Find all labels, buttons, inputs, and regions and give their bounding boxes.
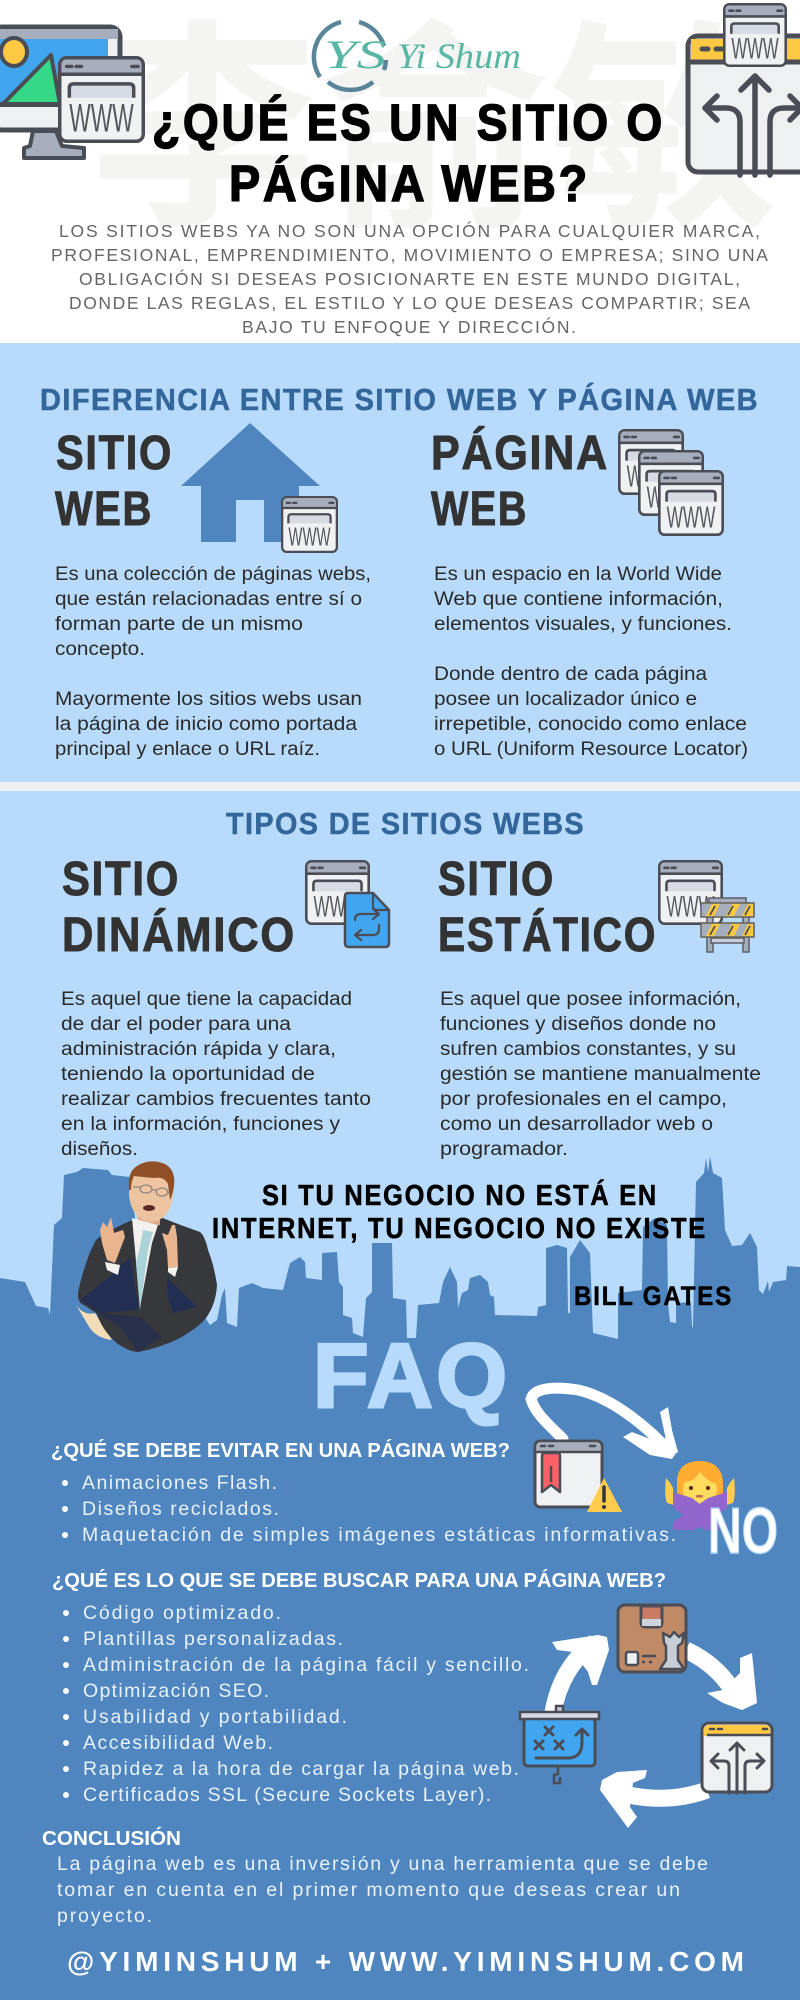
list: buscar: Accesibilidad Web.	[83, 1732, 273, 1754]
sitio dinamico label: SITIO	[62, 853, 180, 906]
pagina web text	[434, 564, 748, 760]
arrow: to no-sign person	[531, 1388, 678, 1459]
pagina web label	[431, 426, 609, 536]
sitio dinamico text: administración rápida y clara,	[61, 1039, 336, 1060]
icon: browser by house: WWW	[288, 522, 331, 552]
conclusion text: tomar en cuenta en el primer momento que deseas crear un	[57, 1879, 680, 1901]
icon: browser with sync document	[306, 861, 389, 947]
icon: browser stack: WWW	[667, 501, 716, 534]
logo: Yi Shum	[314, 22, 521, 90]
footer handle: @YIMINSHUM + WWW.YIMINSHUM.COM	[67, 1946, 744, 1977]
title: ¿QUÉ ES UN SITIO O	[152, 94, 665, 151]
icon: browser with barricade: WWW	[666, 891, 715, 924]
list: evitar: Maquetación de simples imágenes estáticas informativas.	[82, 1524, 676, 1546]
sitio estatico text	[440, 989, 761, 1160]
sitio dinamico label: DINÁMICO	[62, 908, 296, 962]
heading: tipos: TIPOS DE SITIOS WEBS	[226, 806, 585, 841]
heading: diferencia: DIFERENCIA ENTRE SITIO WEB Y PÁGINA WEB	[40, 382, 759, 417]
sitio dinamico text: teniendo la oportunidad de	[61, 1064, 315, 1085]
list: buscar: Certificados SSL (Secure Sockets Layer).	[83, 1784, 491, 1806]
icon: browser bookmark warning	[535, 1441, 622, 1512]
icon: browser header left: WWW	[69, 97, 134, 141]
intro text: LOS SITIOS WEBS YA NO SON UNA OPCIÓN PARA CUALQUIER MARCA,	[59, 220, 760, 241]
quote	[212, 1178, 707, 1245]
icon: browser header right	[724, 4, 786, 66]
sitio dinamico text: en la información, funciones y	[61, 1114, 341, 1135]
sitio dinamico label	[62, 853, 296, 962]
heading: evitar: ¿QUÉ SE DEBE EVITAR EN UNA PÁGINA WEB?	[51, 1439, 510, 1462]
list: buscar: Código optimizado.	[83, 1602, 281, 1624]
title	[152, 94, 665, 212]
list: buscar	[63, 1602, 529, 1806]
pagina web label: PÁGINA	[431, 426, 609, 480]
list: buscar: Rapidez a la hora de cargar la página web.	[83, 1758, 519, 1780]
heading: conclusion: CONCLUSIÓN	[42, 1826, 181, 1850]
intro text	[51, 220, 768, 337]
sitio web label	[55, 427, 173, 536]
icon: monitor with picture	[0, 27, 120, 158]
icon: strategy board	[520, 1706, 599, 1783]
sitio web text: Es una colección de páginas webs,	[55, 564, 371, 585]
conclusion text: proyecto.	[57, 1905, 152, 1927]
sitio dinamico text: diseños.	[61, 1139, 138, 1160]
icon: browser stack: WWW	[627, 460, 676, 493]
intro text: OBLIGACIÓN SI DESEAS POSICIONARTE EN ESTE MUNDO DIGITAL,	[79, 268, 740, 289]
logo: Yi Shum: YS	[324, 32, 386, 77]
quote author: BILL GATES	[574, 1281, 733, 1311]
icon: box with chess rook	[618, 1605, 686, 1672]
pagina web text: elementos visuales, y funciones.	[434, 614, 732, 635]
cycle arrows	[552, 1635, 757, 1828]
section: buscar	[52, 1569, 666, 1806]
icon: browser with sync document: WWW	[313, 891, 362, 924]
sitio estatico text: gestión se mantiene manualmente	[440, 1064, 761, 1085]
panel: tipos de sitios	[0, 791, 800, 2000]
list: buscar: Administración de la página fácil y sencillo.	[83, 1654, 529, 1676]
pagina web text: o URL (Uniform Resource Locator)	[434, 739, 748, 760]
logo: Yi Shum: Yi Shum	[397, 36, 521, 76]
quote: INTERNET, TU NEGOCIO NO EXISTE	[212, 1213, 707, 1245]
sitio web text: concepto.	[55, 639, 145, 660]
icon: person gesturing no	[665, 1461, 735, 1530]
intro text: BAJO TU ENFOQUE Y DIRECCIÓN.	[242, 316, 576, 337]
list: buscar: Optimización SEO.	[83, 1680, 269, 1702]
intro text: DONDE LAS REGLAS, EL ESTILO Y LO QUE DESEAS COMPARTIR; SEA	[69, 293, 750, 313]
pagina web text: Donde dentro de cada página	[434, 664, 707, 685]
icon: browser with barricade	[659, 861, 754, 952]
sitio web text: forman parte de un mismo	[55, 614, 303, 635]
sitio web label: SITIO	[56, 427, 173, 480]
sitio web text: principal y enlace o URL raíz.	[55, 739, 320, 760]
intro text: PROFESIONAL, EMPRENDIMIENTO, MOVIMIENTO O EMPRESA; SINO UNA	[51, 245, 768, 265]
portrait: Bill Gates	[76, 1161, 217, 1352]
sitio web text: Mayormente los sitios webs usan	[55, 689, 362, 710]
panel: diferencia	[0, 343, 800, 782]
list: evitar	[62, 1472, 676, 1546]
icon: browser by house	[282, 497, 337, 552]
list: evitar: Animaciones Flash.	[82, 1472, 277, 1494]
sitio estatico label: ESTÁTICO	[438, 908, 657, 962]
sitio dinamico text	[61, 989, 371, 1160]
sitio estatico text: Es aquel que posee información,	[440, 989, 741, 1010]
icon: house	[181, 423, 320, 542]
icon: browser stack: WWW	[647, 481, 696, 514]
list: buscar: Plantillas personalizadas.	[83, 1628, 343, 1650]
quote: SI TU NEGOCIO NO ESTÁ EN	[262, 1178, 658, 1212]
sitio web text	[55, 564, 371, 760]
sitio estatico text: sufren cambios constantes, y su	[440, 1039, 736, 1060]
icon: road browser header right	[688, 36, 800, 175]
sitio estatico text: funciones y diseños donde no	[440, 1014, 716, 1035]
heading: FAQ: FAQ	[313, 1326, 507, 1427]
pagina web text: Es un espacio en la World Wide	[434, 564, 722, 585]
sitio web label: WEB	[55, 483, 153, 536]
sitio web text: que están relacionadas entre sí o	[55, 589, 362, 610]
sitio dinamico text: de dar el poder para una	[61, 1014, 291, 1035]
list: buscar: Usabilidad y portabilidad.	[83, 1706, 347, 1728]
sitio estatico text: por profesionales en el campo,	[440, 1089, 727, 1110]
list: evitar: Diseños reciclados.	[82, 1498, 279, 1520]
sitio estatico text: programador.	[440, 1139, 568, 1160]
sitio dinamico text: Es aquel que tiene la capacidad	[61, 989, 352, 1010]
heading: buscar: ¿QUÉ ES LO QUE SE DEBE BUSCAR PARA UNA PÁGINA WEB?	[52, 1569, 666, 1592]
icon: browser stack	[619, 430, 723, 535]
conclusion text	[57, 1853, 708, 1927]
city skyline	[0, 1156, 800, 2000]
sitio estatico text: como un desarrollador web o	[440, 1114, 713, 1135]
sitio web text: la página de inicio como portada	[55, 714, 357, 735]
pagina web label: WEB	[431, 483, 528, 536]
conclusion text: La página web es una inversión y una herramienta que se debe	[57, 1853, 708, 1875]
icon: road browser cycle	[702, 1723, 772, 1793]
title: PÁGINA WEB?	[229, 155, 590, 212]
pagina web text: Web que contiene información,	[434, 589, 723, 610]
pagina web text: irrepetible, conocido como enlace	[434, 714, 747, 735]
pagina web text: posee un localizador único e	[434, 689, 697, 710]
section: conclusion	[42, 1826, 708, 1927]
icon: browser header left	[60, 58, 143, 141]
sitio dinamico text: realizar cambios frecuentes tanto	[61, 1089, 371, 1110]
section: evitar	[51, 1439, 676, 1546]
sitio estatico label: SITIO	[438, 853, 555, 906]
sitio estatico label	[438, 853, 657, 962]
